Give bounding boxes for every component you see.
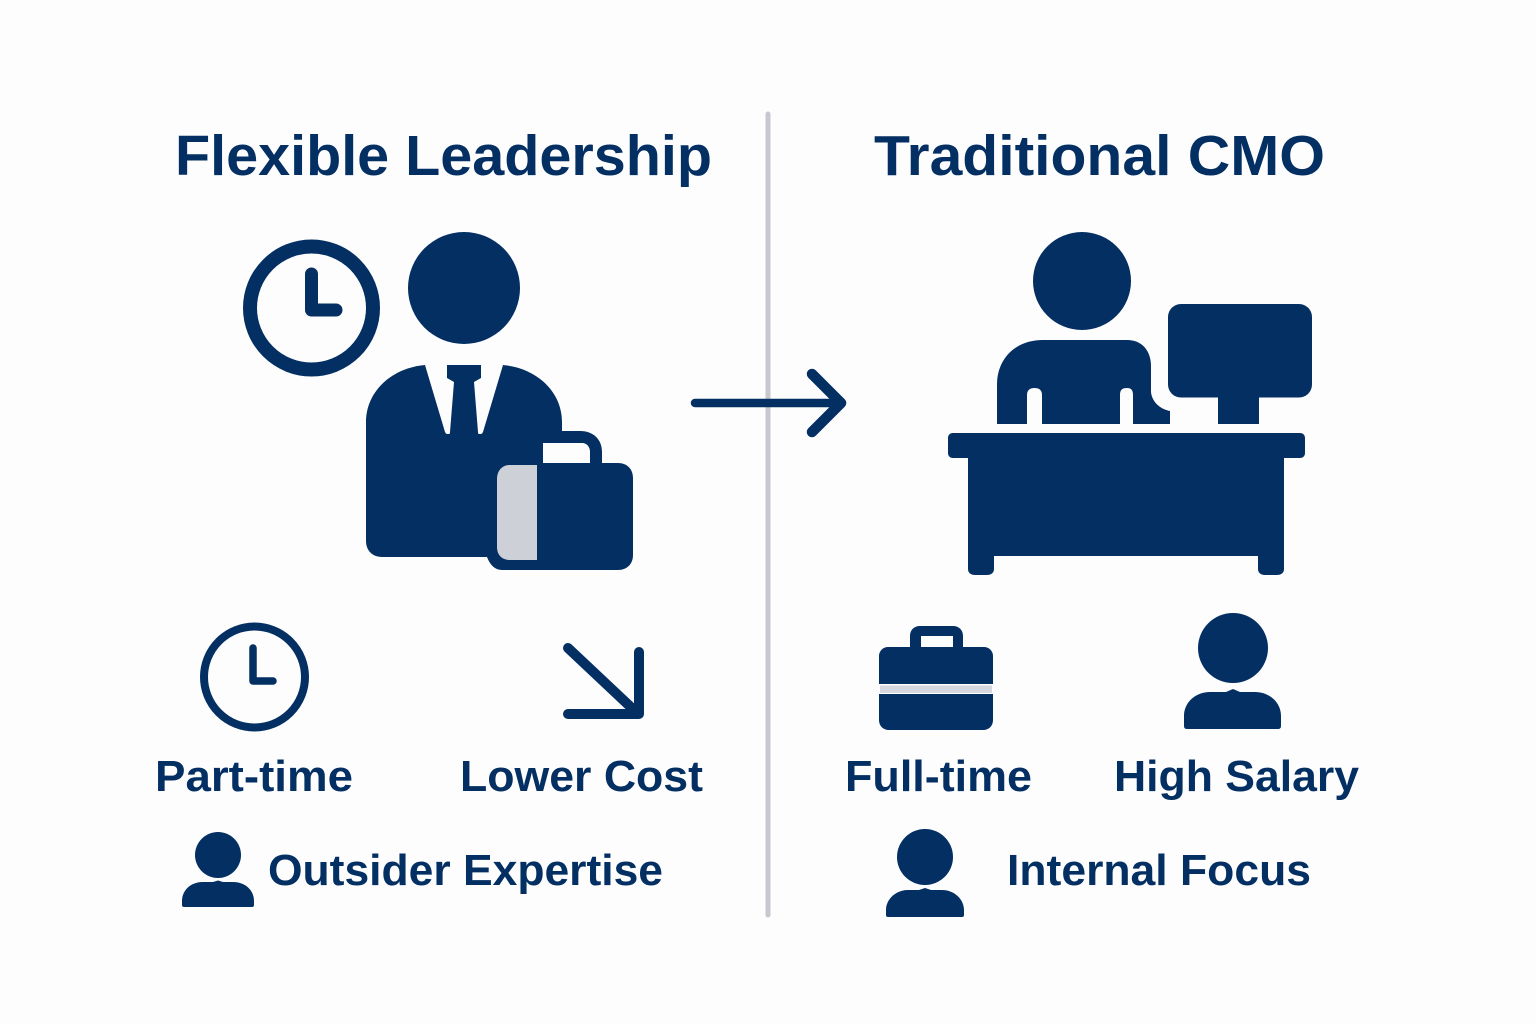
heading: Flexible Leadership: Flexible Leadership: [175, 124, 712, 188]
briefcase panel: [497, 465, 537, 560]
icon: person, high salary: [1184, 613, 1281, 729]
icon: small clock: [204, 626, 305, 728]
briefcase window: [543, 443, 590, 463]
label: Lower Cost: Lower Cost: [460, 752, 703, 801]
icon: person at desk with monitor: [948, 232, 1312, 575]
heading: Traditional CMO: Traditional CMO: [874, 124, 1325, 188]
icon: down-right arrow: [568, 648, 639, 714]
arrow: flexible to traditional: [695, 374, 842, 432]
icon: large clock: [250, 246, 373, 370]
icon: person, internal focus: [886, 829, 964, 917]
label: Outsider Expertise: Outsider Expertise: [268, 846, 663, 895]
icon: briefcase, full-time: [879, 626, 993, 730]
label: High Salary: High Salary: [1114, 752, 1360, 801]
icon: person, outsider expertise: [182, 832, 254, 907]
label: Internal Focus: Internal Focus: [1007, 846, 1311, 895]
label: Full-time: Full-time: [845, 752, 1032, 801]
label: Part-time: Part-time: [155, 752, 353, 801]
icon: businessperson with briefcase: [366, 232, 633, 570]
